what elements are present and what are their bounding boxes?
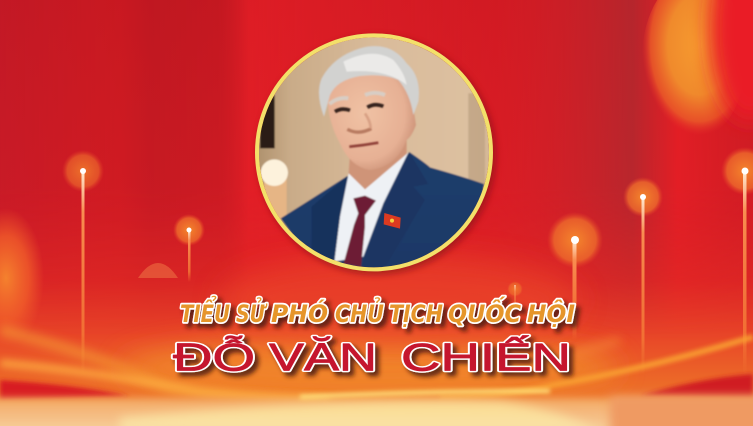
portrait shadow: [257, 36, 496, 275]
shirt: [334, 153, 408, 262]
glow: top right: [642, 0, 753, 140]
title: line 1: [180, 294, 575, 328]
suit: [281, 152, 484, 272]
portrait circle: [250, 30, 500, 275]
title: line 2: [173, 334, 571, 380]
title: line 2: VĂN: [269, 336, 377, 380]
title: line 2: CHIẾN: [401, 336, 571, 380]
face: [327, 67, 416, 170]
title: line 1: QUỐC: [448, 295, 521, 328]
light waves at the bottom: [0, 330, 753, 426]
light poles: [62, 147, 753, 376]
title: line 2: ĐỖ: [173, 334, 255, 380]
portrait ring: [257, 35, 491, 269]
title: line 2: ĐỖ: [173, 334, 255, 380]
title: line 2: VĂN: [269, 336, 377, 380]
title: line 2: CHIẾN: [401, 336, 571, 380]
portrait photo: [259, 37, 489, 268]
title: line 1: PHÓ: [271, 298, 328, 328]
lapels: [396, 154, 416, 182]
title: line 1: CHỦ: [335, 295, 384, 328]
hair: [319, 46, 419, 117]
pin: [384, 213, 401, 229]
tie: [344, 196, 376, 267]
title: line 1: TIỂU: [180, 294, 230, 328]
brows, eyes, nose, mouth: [329, 93, 385, 147]
title: line 1: HỘI: [527, 298, 575, 328]
neck: [348, 137, 407, 190]
title: line 1: SỬ: [236, 295, 268, 328]
small dome glow: [138, 263, 178, 278]
title: line 1: TỊCH: [389, 300, 443, 328]
